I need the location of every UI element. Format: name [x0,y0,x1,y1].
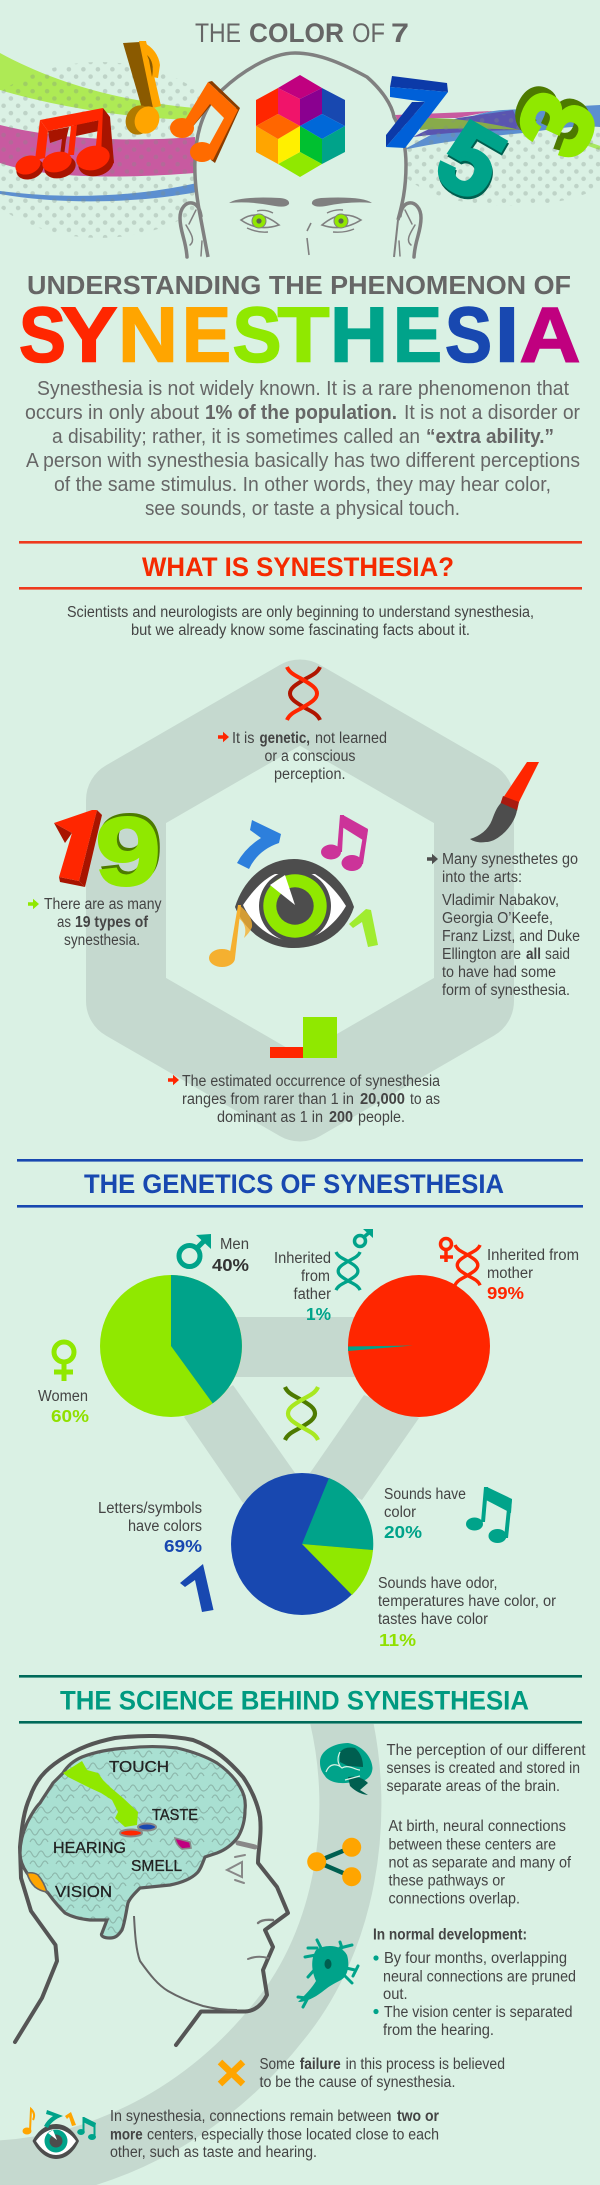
text: at birth: connections overlap. [388,1890,520,1907]
nose [307,223,311,255]
brain region: smell [175,1838,191,1849]
text: in synesthesia: two or [397,2108,439,2125]
pie chart: types [231,1473,373,1615]
fact: arts: all [526,946,541,963]
section heading: genetics: THE GENETICS OF SYNESTHESIA [84,1169,504,1199]
fact: occurrence: 200 [329,1109,353,1126]
pie connector triangle [184,1317,420,1503]
icon: small female symbol [440,1238,453,1262]
icon: neuron [298,1940,358,2007]
icon: network [307,1838,361,1886]
brain region: vision [27,1873,47,1892]
fact: occurrence: 20,000 [360,1091,405,1108]
icon: number 7 [386,76,448,148]
fact: arts: Vladimir Nabakov, [442,892,559,909]
label: inherited from mother: 99% [487,1283,524,1303]
fact: arts: Ellington are [442,946,521,963]
section heading: what is synesthesia: WHAT IS SYNESTHESIA? [142,552,454,582]
title: the color of 7: COLOR [249,18,344,48]
fact: arts [427,851,580,999]
icon: blue one [180,1564,214,1612]
intro paragraph: of the same stimulus. In other words, they may hear color, [54,473,551,496]
text: in synesthesia: centers, especially those located close to each [147,2126,439,2143]
label: sounds have odor 11%: temperatures have color, or [378,1593,556,1610]
label: letters symbols 69%: Letters/symbols [98,1500,202,1517]
icon: small male symbol [354,1229,373,1246]
icon: orange note [170,81,240,163]
label: sounds have odor 11%: Sounds have odor, [378,1575,498,1592]
hexagon ring [126,700,474,1102]
brain region: hearing [120,1830,142,1836]
heading: synesthesia rainbow word: T [278,290,330,378]
header ribbons left [0,53,197,201]
intro paragraph: A person with synesthesia basically has two different perceptions [26,449,580,472]
icon: brain [320,1743,372,1795]
fact: occurrence [168,1073,440,1126]
text: normal development: The vision center is separated [384,2004,572,2021]
icon: magenta note [321,815,368,871]
label: men 40%: Men [220,1236,249,1253]
section intro text: but we already know some fascinating facts about it. [131,622,470,639]
label: women 60% [38,1388,89,1426]
label: sounds have color 20% [384,1486,466,1542]
icon: orange translucent note [209,905,252,967]
brain region: touch [63,1761,138,1827]
fact: 19 types: as [57,914,71,931]
fact: genetic [218,730,387,783]
label: inherited from mother: Inherited from [487,1247,579,1264]
text: normal development: out. [383,1986,408,2003]
icon: paintbrush [470,762,539,842]
icon: number 5: 5 [421,102,523,224]
fact: genetic: genetic, [260,730,310,747]
central eye illustration [235,859,354,948]
text: at birth: not as separate and many of [388,1855,572,1872]
text: failure: Some [260,2056,295,2073]
fact: 19 types: 19 types of [75,914,149,931]
profile face details [227,1843,273,1959]
section intro text [67,604,534,639]
brain [20,1746,245,1938]
label: sounds have odor 11% [378,1575,556,1650]
icon: female symbol [54,1342,74,1381]
heading: synesthesia rainbow word: S [232,290,282,378]
text: in synesthesia: other, such as taste and hearing. [110,2144,317,2161]
text: at birth: At birth, neural connections [388,1818,566,1835]
label: inherited from mother [487,1247,579,1303]
title: the color of 7: OF [352,18,385,48]
text: failure [260,2056,505,2091]
text: in synesthesia [110,2108,439,2161]
title: the color of 7 [195,18,409,48]
text: perception: senses is created and stored in [386,1760,580,1777]
icon: number 5: 5 [420,99,522,222]
eyebrows [229,198,372,207]
label: women 60%: Women [38,1388,88,1405]
brain labels: TOUCH [109,1759,169,1776]
heading: synesthesia rainbow word: S [19,290,66,378]
icon: number 19 [54,794,163,906]
fact: arts: Many synesthetes go [442,851,578,868]
icon: red beamed notes [13,108,117,183]
brain region: taste [138,1824,156,1830]
intro paragraph: “extra ability.” [426,425,554,448]
label: sounds have odor 11%: 11% [379,1630,416,1650]
icon: lime dna [285,1387,318,1440]
fact: 19 types [28,896,162,949]
fact: occurrence: The estimated occurrence of synesthesia [182,1073,440,1090]
text: normal development [373,1926,576,2039]
icon: small eye and symbols [22,2109,96,2159]
icon: amber note [121,41,164,139]
text: at birth: between these centers are [388,1836,556,1854]
fact: genetic: perception. [274,766,346,783]
label: inherited from father [274,1250,331,1324]
icon: number 19: 9 [95,797,161,906]
fact: occurrence: people. [358,1109,405,1126]
text: normal development: from the hearing. [383,2022,494,2039]
heading: synesthesia rainbow word: S [445,290,492,378]
intro paragraph [25,377,580,520]
fact: occurrence: ranges from rarer than 1 in [182,1091,354,1108]
heading: synesthesia rainbow word: H [330,290,388,378]
fact: arts: Georgia O’Keefe, [442,910,553,927]
label: letters symbols 69% [98,1500,202,1556]
head outline [195,53,406,257]
brain labels: HEARING [53,1840,126,1857]
head profile [15,1736,288,2045]
jaw line [134,1916,237,2010]
heading: synesthesia rainbow word: A [520,290,580,378]
text: normal development: neural connections are pruned [383,1968,576,1985]
icon: blue seven [237,820,281,869]
intro paragraph: 1% of the population. [205,401,397,424]
intro paragraph: It is not a disorder or [404,401,580,424]
fact: arts: to have had some [442,964,556,981]
pie chart: men and women [100,1275,242,1417]
label: inherited from father: from [301,1268,330,1285]
text: perception: separate areas of the brain. [386,1778,560,1795]
curved arc band [0,1715,350,2172]
label: sounds have color 20%: 20% [384,1522,422,1542]
intro paragraph: see sounds, or taste a physical touch. [145,497,460,520]
icon: orange x [220,2062,243,2084]
label: inherited from father: 1% [306,1304,331,1324]
text: normal development: By four months, overlapping [384,1950,567,1967]
text: failure: to be the cause of synesthesia. [260,2074,455,2091]
fact: occurrence: to as [410,1091,440,1108]
text: normal development: In normal development: [373,1926,527,1944]
left ear [180,203,202,257]
icon: number 19: 9 [97,794,163,903]
header ribbons right [395,105,600,150]
heading: synesthesia rainbow word: E [182,290,231,378]
icon: occurrence bars [270,1017,337,1058]
text: in synesthesia: In synesthesia, connections remain between [110,2108,392,2125]
section heading: science: THE SCIENCE BEHIND SYNESTHESIA [60,1686,529,1716]
icon: teal dna [336,1252,360,1290]
halftone dots [0,60,600,240]
fact: genetic: or a conscious [264,748,356,765]
text: at birth: these pathways or [388,1873,505,1890]
label: men 40%: 40% [212,1255,249,1275]
intro paragraph: a disability; rather, it is sometimes called an [52,425,420,448]
label: sounds have color 20%: color [384,1504,416,1521]
heading: synesthesia rainbow word: N [118,290,178,378]
heading: synesthesia rainbow word: I [495,290,519,378]
label: men 40% [212,1236,249,1275]
text: in synesthesia: more [110,2126,143,2143]
label: inherited from mother: mother [487,1265,533,1282]
label: letters symbols 69%: have colors [128,1518,202,1535]
fact: 19 types: synesthesia. [64,932,140,949]
label: sounds have color 20%: Sounds have [384,1486,466,1503]
heading: synesthesia rainbow word [19,290,580,378]
text: perception [386,1742,586,1795]
brain labels: VISION [55,1884,112,1901]
fact: genetic: It is [232,730,255,747]
text: at birth [388,1818,572,1907]
label: inherited from father: father [294,1286,331,1303]
title: the color of 7: 7 [391,18,409,48]
icon: lime one [349,909,378,947]
label: letters symbols 69%: 69% [164,1536,202,1556]
icon: red dna [287,667,320,720]
intro paragraph: Synesthesia is not widely known. It is a rare phenomenon that [37,377,569,400]
heading: synesthesia rainbow word: Y [60,290,118,378]
fact: arts: said [545,946,570,963]
right ear [399,203,421,257]
fact: arts: Franz Lizst, and Duke [442,928,580,945]
brain labels: SMELL [131,1858,182,1875]
title: the color of 7: THE [195,18,241,48]
brain labels: TASTE [152,1807,198,1824]
fact: occurrence: dominant as 1 in [217,1109,323,1126]
pie chart: inherited [348,1275,490,1417]
fact: 19 types: There are as many [44,896,162,913]
label: women 60%: 60% [51,1406,89,1426]
label: inherited from father: Inherited [274,1250,331,1267]
fact: arts: form of synesthesia. [442,982,570,999]
heading: synesthesia rainbow word: E [393,290,442,378]
label: sounds have odor 11%: tastes have color [378,1611,488,1628]
brain labels [53,1759,198,1901]
text: failure: in this process is believed [346,2056,505,2073]
fact: genetic: not learned [315,730,387,747]
text: failure: failure [300,2056,341,2073]
section intro text: Scientists and neurologists are only beginning to understand synesthesia, [67,604,534,621]
text: perception: The perception of our different [386,1742,586,1759]
face eyes [241,210,361,232]
icon: teal note [466,1487,512,1543]
icon: red dna genetics [455,1245,480,1285]
heading: understanding the phenomenon of: UNDERSTANDING THE PHENOMENON OF [27,272,571,300]
icon: male symbol [179,1234,211,1266]
intro paragraph: occurs in only about [25,401,199,424]
fact: arts: into the arts: [442,869,522,886]
colour hexagon [256,75,345,177]
